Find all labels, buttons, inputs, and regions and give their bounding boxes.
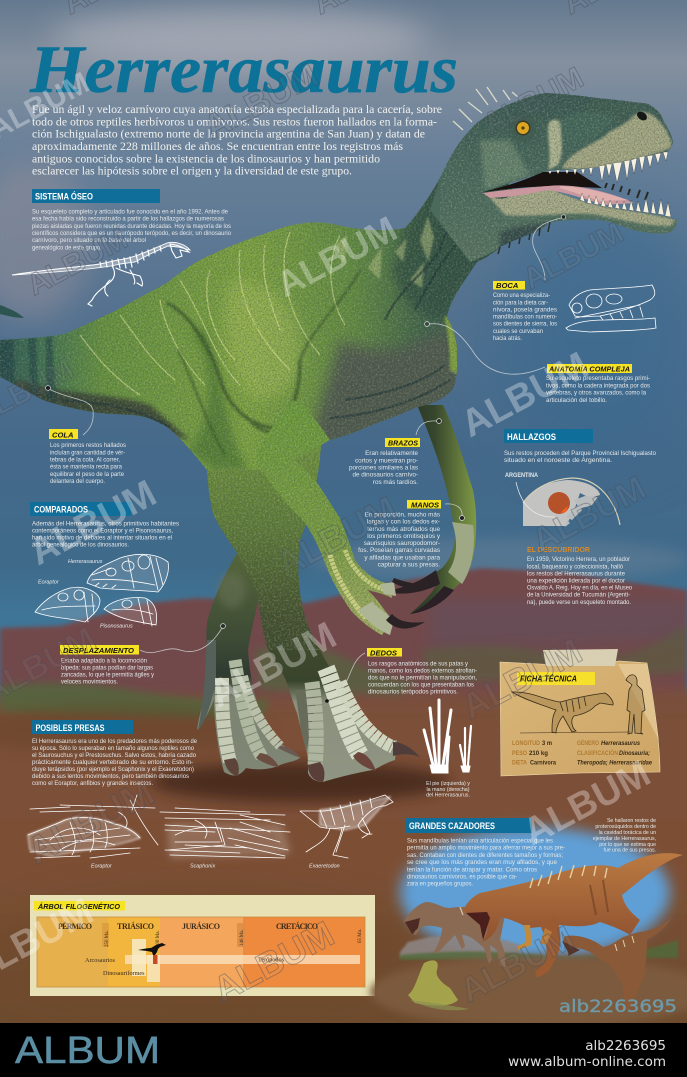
timeline chart (37, 917, 365, 987)
data rows: 3 m (542, 741, 552, 747)
mouth interior (483, 172, 602, 192)
timeline chart: Terópodos (258, 956, 285, 964)
panel: brazos (349, 438, 420, 486)
panel: dedos: manos, como los dedos externos atrofian- (368, 668, 477, 674)
heading bar (406, 818, 532, 833)
tail fragment (0, 305, 24, 318)
panel: manos: fos. Poseían garras curvadas (358, 547, 440, 554)
panel: sistema oseo: piezas aisladas que fueron reunidas durante décadas. Hoy la mayoría de los (32, 223, 231, 230)
panel: dedos: la mano (derecha) (426, 787, 470, 793)
panel: hallazgos: ARGENTINA (505, 472, 538, 479)
body text: Sus mandíbulas tenían una articulación especial que les (407, 838, 553, 844)
watermarks: ALBUM (478, 61, 589, 141)
image id on scene: alb2263695 (559, 997, 677, 1017)
panel: anatomia compleja: ANATOMÍA COMPLEJA (548, 364, 630, 374)
panel: manos: ternos más atrofiados que (367, 526, 440, 533)
panel: ficha tecnica: FICHA TÉCNICA (520, 674, 577, 684)
heading: ÁRBOL FILOGENÉTICO (37, 902, 120, 911)
data rows: PESO (512, 751, 527, 757)
panel: cola: COLA (52, 430, 74, 440)
panel: el descubridor: na), puede verse un esqueleto montado. (527, 599, 631, 606)
panel: anatomia compleja: Su esqueleto presentaba rasgos primi- (546, 375, 650, 382)
timeline chart: TRIÁSICO (117, 921, 154, 931)
data rows: GÉNERO (577, 739, 599, 747)
panel: posibles presas: cluye terápsidos (por ejemplo el Scaphonix y el Exaeretodon) (32, 766, 194, 773)
heading bar: GRANDES CAZADORES (409, 821, 495, 831)
panel: anatomia compleja: vértebras, y otros avanzados, como la (546, 390, 646, 397)
panel: dedos: concuerdan con los que presentaban los (368, 682, 474, 688)
panel: boca: BOCA (496, 281, 518, 290)
panel: arbol filogenetico (30, 895, 375, 996)
panel: boca (493, 281, 656, 342)
panel: desplazamiento (60, 645, 155, 686)
panel: hallazgos: situado en el noroeste de Argentina. (504, 457, 612, 464)
watermarks: ALBUM (22, 222, 133, 302)
panel: comparados: árbol genealógico de los dinosaurios. (32, 542, 129, 549)
green lizard creature (408, 960, 470, 1010)
panel: el descubridor: los restos del Herrerasaurus durante (527, 570, 625, 578)
near arm (256, 400, 425, 635)
panel: sistema oseo: esa fecha había sido reconstruido a partir de los hallazgos de numerosas (32, 216, 224, 223)
watermarks: ALBUM (23, 472, 163, 574)
footer bar: www.album-online.com (508, 1054, 666, 1070)
panel: posibles presas: debido a sus lentos movimientos, pero también dinosaurios (32, 773, 189, 780)
panel: cola: ésta se mantenía recta para (50, 464, 122, 471)
intro text: ción Ischigualasto (extremo norte de la provincia argentina de San Juan) y datan de (32, 128, 425, 141)
panel: posibles presas: POSIBLES PRESAS (36, 723, 104, 733)
skeleton sketch (12, 242, 190, 306)
panel: desplazamiento: bípeda: sus patas podían dar largas (61, 664, 153, 672)
timeline chart: 208 Ma. (156, 930, 161, 947)
watermarks: ALBUM (526, 469, 652, 560)
panel: manos: largas y con los dedos ex- (367, 519, 440, 526)
intro text: Fue un ágil y veloz carnívoro cuya anatomía estaba especializada para la cacería, sobre (32, 103, 442, 116)
panel: anatomia compleja: articulación del tobillo. (546, 397, 607, 404)
large orange dinosaur (463, 853, 683, 978)
panel: anatomia compleja: tivos, como la cadera integrada por dos (546, 382, 650, 390)
panel: sistema oseo: carnívoro, pero situado en la base del árbol (32, 237, 146, 244)
shading (310, 330, 456, 440)
timeline chart: Arcosaurios (85, 957, 115, 964)
data rows: Dinosauria; (619, 751, 650, 757)
title: Herrerasaurus (29, 31, 458, 107)
hip and thigh creases (167, 270, 360, 455)
panel: posibles presas: El Herrerasaurus era uno de los predadores más poderosos de (32, 738, 197, 745)
data rows: Theropoda; Herrerasauridae (577, 760, 653, 766)
panel: comparados: contemporáneos como el Eoraptor y el Pisonosaurus, (32, 528, 173, 534)
panel: el descubridor: En 1959, Victorino Herrera, un poblador (527, 556, 630, 563)
small dinosaur (562, 915, 673, 1010)
intro text: todo de otros reptiles herbívoros u omnívoros. Sus restos fueron hallados en la forma- (32, 115, 437, 128)
panel: posibles presas: Exaeretodon (309, 864, 340, 870)
panel: comparados: Además del Herrerasaurus, otros primitivos habitantes (32, 520, 179, 528)
panel: posibles presas: Scaphonix (190, 864, 215, 870)
panel: sistema oseo: SISTEMA ÓSEO (35, 190, 93, 202)
far arm (383, 405, 476, 614)
watermarks: ALBUM (21, 771, 161, 873)
watermarks: ALBUM (207, 913, 341, 1010)
panel: manos: y afiladas que usaban para (364, 554, 440, 561)
panel: anatomia compleja (546, 364, 650, 404)
skull sketch (566, 285, 656, 332)
watermarks: ALBUM (518, 216, 629, 296)
panel: comparados: COMPARADOS (34, 504, 88, 514)
watermarks: ALBUM (203, 614, 343, 716)
prey sketches (28, 795, 393, 858)
intro text (32, 103, 442, 178)
intro text: aproximadamente 228 millones de años. Se encuentran entre los registros más (32, 140, 403, 153)
watermarks: ALBUM (270, 488, 404, 585)
panel: hallazgos: HALLAZGOS (507, 432, 556, 442)
panel: sistema oseo: científicos considera que es un saurópodo terópodo, es decir, un dinosaurio (32, 230, 231, 237)
rear leg (197, 553, 301, 776)
footer id and url: alb2263695 (585, 1038, 666, 1054)
panel: dedos (367, 648, 477, 798)
watermarks: ALBUM (517, 752, 657, 854)
watermarks: ALBUM (455, 344, 595, 446)
neck dorsal spines (453, 87, 518, 130)
panel: hallazgos (504, 429, 656, 527)
panel: cola: incluían gran cantidad de vér- (50, 449, 125, 456)
body text (407, 838, 565, 888)
data rows (512, 739, 653, 766)
intro text: antiguos conocidos sobre la existencia de los dinosaurios y han permitido (32, 152, 380, 165)
body text: zara en pequeños grupos. (407, 880, 473, 888)
watermarks: ALBUM (455, 630, 589, 727)
panel: comparados (30, 502, 179, 630)
panel: posibles presas: Eoraptor (91, 864, 112, 870)
data rows: Carnívora (530, 760, 557, 766)
panel: boca: mandíbulas con numero- (493, 314, 557, 321)
panel: el descubridor: Osvaldo A. Reig. Hoy en día, en el Museo (527, 584, 632, 592)
side note: Se hallaron restos de (607, 818, 656, 824)
panel: dedos: del Herrerasaurus. (426, 792, 470, 798)
body text: sas. Contaban con dientes de diferentes tamaños y formas; (407, 852, 563, 859)
panel: brazos: cortos y muestran pro- (355, 458, 418, 464)
panel: grandes cazadores (370, 818, 687, 1028)
panel: cola: delantera del cuerpo. (50, 478, 105, 485)
panel: el descubridor: local, baqueano y coleccionista, halló (527, 564, 623, 570)
panel: manos: los primeros ornitisquios y (367, 533, 441, 540)
timeline chart: CRETÁCICO (276, 921, 318, 931)
panel: el descubridor: una expedición liderada por el doctor (527, 578, 625, 584)
panel: brazos: de dinosaurios carnívo- (353, 472, 418, 478)
timeline chart: PÉRMICO (58, 921, 92, 931)
panel: posibles presas: el Saurosuchus y el Prestosuchus. Salvo estos, habría cazado (32, 752, 196, 759)
panel: dedos: DEDOS (370, 648, 397, 658)
watermarks: ALBUM (454, 919, 580, 1010)
timeline chart: 250 Ma. (105, 930, 110, 947)
timeline chart: JURÁSICO (182, 921, 220, 931)
data rows: Herrerasaurus (601, 741, 641, 747)
torso, tail and neck (0, 130, 520, 470)
timeline chart: 65 Ma. (358, 929, 363, 943)
icon: small dinosaur silhouette (138, 943, 166, 955)
panel: el descubridor: de la Universidad de Tucumán (Argenti- (527, 592, 630, 598)
data rows: CLASIFICACIÓN (577, 749, 618, 757)
panel: boca: ción para la dieta car- (493, 299, 548, 306)
panel: el descubridor (527, 545, 632, 606)
panel: comparados: Pisonosaurus (100, 624, 133, 630)
panel: brazos: ros más tardíos. (373, 479, 418, 486)
callout lines (46, 215, 566, 703)
teeth (548, 152, 668, 183)
panel: dedos: El pie (izquierda) y (426, 781, 470, 787)
side note: ejemplar de Herrerasaurus, (593, 836, 656, 842)
side note: por lo que se estima que (599, 842, 656, 848)
eye (516, 120, 530, 136)
data rows: 210 kg (529, 751, 548, 757)
panel: dedos: Los rasgos anatómicos de sus patas y (368, 660, 469, 668)
body text: permitía un amplio movimiento para aferrar mejor a sus pre- (407, 845, 565, 852)
scene backdrop (370, 827, 687, 1028)
timeline chart: Dinosauriformes (103, 970, 145, 977)
panel: manos: MANOS (411, 500, 439, 510)
panel: manos (358, 500, 441, 568)
side note: la cavidad torácica de un (599, 830, 656, 836)
panel: posibles presas (28, 720, 393, 870)
panel: sistema oseo: Su esqueleto completo y articulado fue conocido en el año 1992. Antes de (32, 208, 228, 216)
panel: desplazamiento: Estaba adaptado a la locomoción (61, 658, 147, 664)
panel: brazos: porciones similares a las (349, 464, 418, 472)
body text: se cree que los más grandes eran muy afilados, y que (407, 859, 557, 866)
panel: sistema oseo: genealógico de este grupo. (32, 244, 102, 252)
panel: desplazamiento: zancadas, lo que le permitía ágiles y (61, 672, 155, 678)
data rows: DIETA (512, 760, 528, 766)
panel: cola: tebras de la cola. Al correr, (50, 456, 120, 464)
panel: boca: sos dientes de sierra, los (493, 321, 557, 328)
panel: comparados: Eoraptor (38, 580, 59, 586)
panel: posibles presas: como el Eoraptor, anfibios y grandes insectos. (32, 780, 153, 787)
panel: posibles presas: prácticamente cualquier vertebrado de su entorno. Esto in- (32, 759, 193, 766)
panel: brazos: BRAZOS (388, 438, 418, 448)
left dinosaur (403, 902, 505, 967)
near leg (202, 444, 420, 782)
intro text: esclarecer las hipótesis sobre el origen y la diversidad de este grupo. (32, 165, 352, 178)
panel: boca: cuales se curvaban (493, 328, 543, 335)
side note (593, 818, 656, 854)
panel: boca: hacia atrás. (493, 335, 522, 342)
panel: manos: saurisquios sauropodomor- (364, 540, 440, 547)
panel: hallazgos: Sus restos proceden del Parque Provincial Ischigualasto (504, 450, 656, 457)
panel: boca: nívora, poseía grandes (493, 306, 557, 314)
panel: posibles presas: su época. Sólo lo superaban en tamaño algunos reptiles como (32, 745, 194, 752)
panel: manos: capturar a sus presas. (378, 562, 440, 568)
panel: cola: equilibrar el peso de la parte (50, 471, 124, 478)
panel: boca: Como una especializa- (493, 292, 550, 299)
panel: brazos: Eran relativamente (365, 450, 418, 457)
panel: manos: En proporción, mucho más (365, 512, 440, 518)
map of South America on globe (516, 478, 620, 527)
head (430, 90, 680, 265)
panel: desplazamiento: DESPLAZAMIENTO (63, 646, 134, 655)
foot and hand bones sketch (424, 700, 471, 773)
album logo: ALBUM (15, 1030, 160, 1072)
watermarks: ALBUM (270, 208, 404, 305)
watermarks: ALBUM (198, 56, 324, 147)
data rows: LONGITUD (512, 741, 541, 747)
panel: sistema oseo (12, 189, 231, 306)
side note: fue una de sus presas. (604, 848, 656, 854)
panel: ficha tecnica (500, 649, 660, 776)
timeline chart: 146 Ma. (240, 929, 245, 946)
panel: comparados: Herrerasaurus (68, 559, 103, 565)
tape (543, 649, 618, 666)
panel: el descubridor: EL DESCUBRIDOR (527, 545, 591, 554)
panel: comparados: han sido motivo de debates al intentar situarlos en el (32, 535, 172, 542)
illustration: Herrerasaurus dinosaur (0, 87, 680, 782)
body text: dinosaurios carnívoros, es posible que ca- (407, 874, 517, 880)
panel: cola (49, 429, 126, 485)
panel: dedos: dos que no le permitían la manipulación, (368, 674, 477, 682)
body text: tenían la función de atrapar y matar. Como otros (407, 866, 537, 873)
skull sketches (35, 554, 168, 626)
panel: desplazamiento: veloces movimientos. (61, 678, 118, 686)
panel: cola: Los primeros restos hallados (50, 442, 126, 449)
dinosaur drawing (512, 675, 645, 734)
panel: dedos: dinosaurios terópodos primitivos. (368, 689, 458, 696)
side note: proterosúquidos dentro de (595, 824, 656, 830)
footer bar (0, 997, 687, 1077)
